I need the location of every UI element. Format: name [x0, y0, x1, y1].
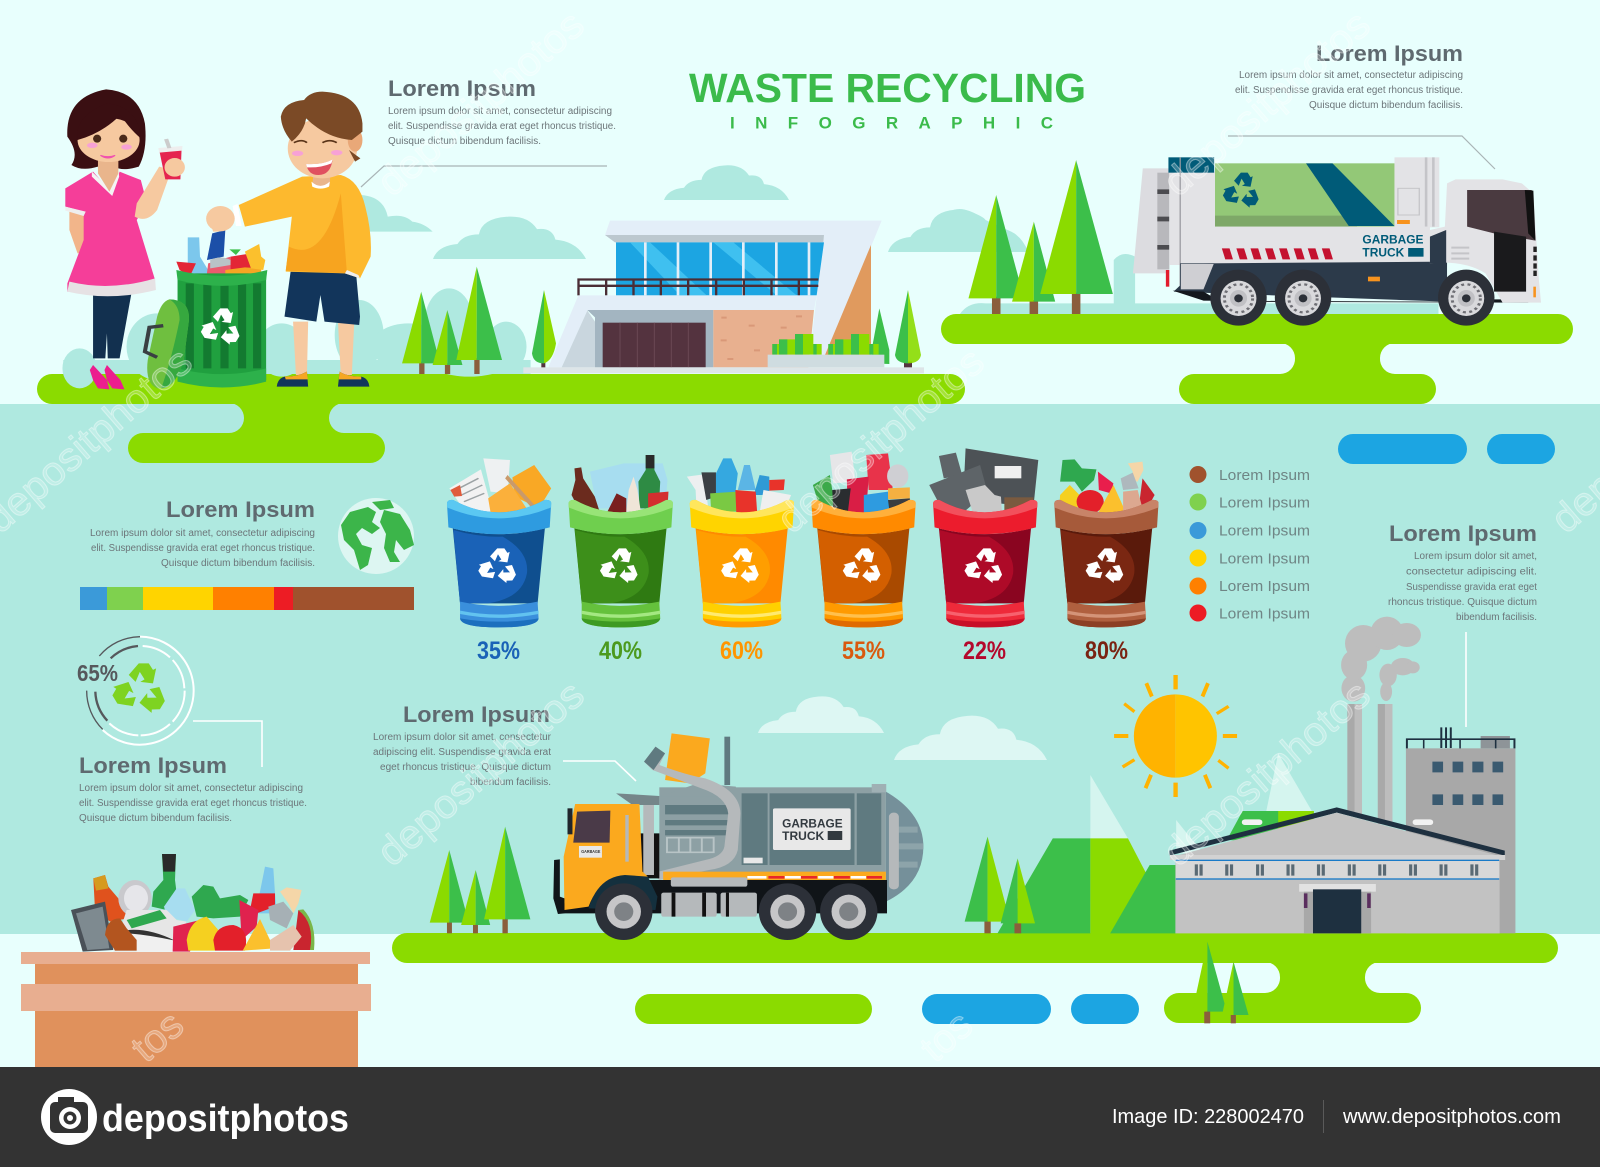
- leader line: lorry: [563, 761, 636, 781]
- percent labels: [477, 637, 1128, 665]
- rear door: [1133, 168, 1169, 287]
- garbage truck: white and green: [1133, 157, 1541, 326]
- small trees by house: [532, 290, 921, 368]
- watermarks: depositphotos: [369, 2, 593, 205]
- back arm: [69, 212, 88, 253]
- text block: people: elit. Suspendisse gravida erat eget rhoncus tristique.: [388, 121, 616, 132]
- building frame: [605, 221, 882, 367]
- bin: paper: [447, 458, 551, 627]
- shorts: [284, 272, 360, 325]
- legend: Lorem Ipsum: [1219, 468, 1310, 484]
- hand: [206, 204, 242, 232]
- title: INFOGRAPHIC: [730, 114, 1053, 132]
- trees: [968, 160, 1113, 314]
- hair: [281, 92, 362, 162]
- logo mark: [41, 1089, 97, 1145]
- clouds, lower: [758, 696, 1047, 760]
- footer bar: [0, 1067, 1600, 1167]
- footer logo: [41, 1089, 349, 1145]
- icon: sun: [1114, 675, 1237, 797]
- leader line: gauge: [193, 721, 262, 767]
- cab: GARBAGE: [581, 849, 600, 854]
- ground: upper left grass platform: [37, 374, 965, 463]
- text block: factory: Lorem ipsum dolor sit amet,: [1414, 551, 1537, 562]
- legend: Lorem Ipsum: [1219, 496, 1310, 512]
- recycling bins chart: [447, 448, 1158, 627]
- percent labels: 60%: [720, 637, 763, 665]
- cab-side white block: [1394, 157, 1439, 227]
- railing: [577, 278, 818, 295]
- lifting arm: [644, 747, 740, 880]
- mountains: [997, 753, 1314, 933]
- truck sign: GARBAGE: [782, 816, 843, 830]
- girl: [65, 89, 185, 389]
- trash can with waste: [145, 230, 267, 388]
- hair back: [67, 89, 146, 169]
- leader line: factory: [1465, 632, 1467, 727]
- text block: world share: Lorem Ipsum: [166, 497, 315, 522]
- footer logo: depositphotos: [102, 1098, 349, 1140]
- wheels: [1210, 270, 1494, 326]
- text block: gauge: Lorem Ipsum: [79, 753, 227, 778]
- text block: factory: Suspendisse gravida erat eget: [1406, 582, 1537, 593]
- percent labels: 35%: [477, 637, 520, 665]
- text block: collection truck: elit. Suspendisse gravida erat eget rhoncus tristique.: [1235, 85, 1463, 96]
- body: [616, 737, 886, 872]
- text block: people: Lorem Ipsum: [388, 76, 536, 101]
- legs: [93, 293, 131, 358]
- text block: factory: rhoncus tristique. Quisque dictum: [1388, 597, 1537, 608]
- footer url: www.depositphotos.com: [1342, 1106, 1561, 1128]
- neck and face: [98, 150, 118, 192]
- percent labels: 55%: [842, 637, 885, 665]
- gauge value: 65%: [77, 660, 118, 686]
- background mint band: [0, 404, 1600, 934]
- legend: [1190, 466, 1310, 622]
- bin: plastic: [687, 458, 794, 627]
- text block: lorry: Lorem ipsum dolor sit amet, consectetur: [373, 732, 552, 743]
- boy: [206, 92, 371, 387]
- stripe: [663, 872, 886, 880]
- leader line: collection truck: [1228, 136, 1495, 169]
- text block: world share: elit. Suspendisse gravida erat eget rhoncus tristique.: [91, 543, 315, 554]
- mouth: [306, 159, 333, 175]
- text block: collection truck: Lorem ipsum dolor sit amet, consectetur adipiscing: [1239, 70, 1463, 81]
- front arm: [135, 167, 171, 219]
- house: [523, 221, 924, 373]
- legend: Lorem Ipsum: [1219, 524, 1310, 540]
- waste pile: [71, 854, 314, 952]
- text block: lorry: eget rhoncus tristique. Quisque dictum: [380, 762, 551, 773]
- legend: Lorem Ipsum: [1219, 552, 1310, 568]
- bin: glass: [569, 455, 673, 627]
- truck label: GARBAGE: [1362, 233, 1424, 246]
- text block: lorry: bibendum facilisis.: [470, 777, 551, 788]
- watermarks: tos: [912, 1003, 981, 1071]
- truck label: TRUCK: [1362, 246, 1404, 259]
- text block: gauge: Quisque dictum bibendum facilisis.: [79, 813, 232, 824]
- trees beside house: [402, 267, 502, 374]
- text block: lorry: [373, 702, 552, 788]
- stacked colour bar: [80, 587, 414, 610]
- blue water pills: [922, 434, 1555, 1024]
- tower: [1406, 727, 1515, 933]
- neck and face: [312, 167, 331, 188]
- ground: lower grass platform: [392, 933, 1558, 1024]
- icon: globe: [338, 498, 414, 574]
- shirt: [239, 175, 371, 278]
- recycling gauge: [87, 637, 194, 745]
- text block: collection truck: Lorem Ipsum: [1316, 41, 1463, 66]
- text block: people: Lorem ipsum dolor sit amet, consectetur adipiscing: [388, 106, 612, 117]
- main hall: [1169, 807, 1505, 933]
- gauge arcs: [87, 637, 194, 745]
- legend: Lorem Ipsum: [1219, 579, 1310, 595]
- percent labels: 80%: [1085, 637, 1128, 665]
- percent labels: 40%: [599, 637, 642, 665]
- cab: [1430, 179, 1541, 303]
- recycling symbol on truck: [1220, 173, 1262, 209]
- truck label: [1362, 233, 1424, 259]
- truck sign: [773, 808, 851, 850]
- watermarks: depositphotos: [369, 672, 593, 875]
- watermarks: depositphotos: [1155, 2, 1379, 205]
- cardboard box: [21, 952, 371, 1067]
- bushes and planter: [768, 334, 884, 367]
- legend: Lorem Ipsum: [1219, 606, 1310, 622]
- fuel tanks: [661, 877, 757, 917]
- trees beside lorry: [430, 827, 530, 933]
- watermarks: tos: [123, 1003, 192, 1071]
- text block: gauge: elit. Suspendisse gravida erat eget rhoncus tristique.: [79, 798, 307, 809]
- eyes and cheeks: [294, 141, 337, 143]
- vents: [1242, 819, 1262, 825]
- text block: world share: [90, 497, 315, 569]
- text block: people: Quisque dictum bibendum facilisis.: [388, 136, 541, 147]
- red hazard stripes: [1222, 248, 1333, 259]
- text block: factory: [1388, 521, 1537, 623]
- recycling symbol: [109, 663, 170, 715]
- bin: organic: [1054, 459, 1158, 627]
- right-hand trees and hills: [930, 160, 1438, 314]
- hill clouds: [930, 209, 1438, 314]
- garage door: [603, 323, 706, 367]
- ground: upper right grass platform: [941, 314, 1573, 404]
- text block: world share: Quisque dictum bibendum facilisis.: [161, 558, 315, 569]
- leader line: people: [361, 166, 607, 187]
- glass: [616, 242, 824, 295]
- lifted box: [665, 733, 710, 783]
- legs: [293, 322, 354, 375]
- footer divider: [1323, 1100, 1324, 1133]
- cup: [158, 139, 185, 179]
- recycling symbol on can: [198, 308, 243, 346]
- chassis: [564, 880, 887, 913]
- waste in can: [176, 230, 265, 280]
- rear drum: [886, 792, 923, 902]
- clouds and hills, top left: [62, 165, 1028, 388]
- text block: gauge: [79, 753, 307, 824]
- chimneys: [1347, 704, 1392, 824]
- text block: lorry: adipiscing elit. Suspendisse gravida erat: [373, 747, 551, 758]
- text block: factory: Lorem Ipsum: [1389, 521, 1537, 546]
- text block: world share: Lorem ipsum dolor sit amet, consectetur adipiscing: [90, 528, 315, 539]
- text block: lorry: Lorem Ipsum: [403, 702, 550, 727]
- text block: factory: consectetur adipiscing elit.: [1406, 566, 1537, 578]
- wheels: [595, 883, 877, 940]
- brick wall: [713, 310, 814, 367]
- title: [689, 65, 1086, 132]
- percent labels: 22%: [963, 637, 1006, 665]
- title: WASTE RECYCLING: [689, 65, 1086, 111]
- smoke: [1341, 617, 1421, 702]
- footer image id: Image ID: 228002470: [1112, 1106, 1304, 1128]
- factory scene: [965, 617, 1515, 1023]
- watermarks: depositphotos: [769, 339, 993, 542]
- can lid: [145, 299, 189, 388]
- text block: people: [388, 76, 616, 147]
- text block: collection truck: Quisque dictum bibendum facilisis.: [1309, 100, 1463, 111]
- bin: metal and cans: [811, 452, 916, 627]
- trees on lower platform: [1192, 942, 1249, 1023]
- heels: [90, 365, 124, 389]
- watermarks: depositphotos: [1155, 672, 1379, 875]
- trees: [965, 837, 1035, 933]
- truck sign: TRUCK: [782, 829, 825, 843]
- text block: gauge: Lorem ipsum dolor sit amet, consectetur adipiscing: [79, 783, 303, 794]
- garbage truck: orange rear loader: [553, 733, 923, 940]
- text block: collection truck: [1235, 41, 1463, 111]
- green panel: [1215, 163, 1394, 227]
- dress: [65, 172, 155, 292]
- text block: factory: bibendum facilisis.: [1456, 612, 1537, 623]
- bin: electronics: [929, 448, 1038, 627]
- shoes: [277, 372, 369, 387]
- chassis: [1174, 262, 1447, 302]
- cab: [553, 804, 659, 914]
- vent grille: [667, 838, 714, 852]
